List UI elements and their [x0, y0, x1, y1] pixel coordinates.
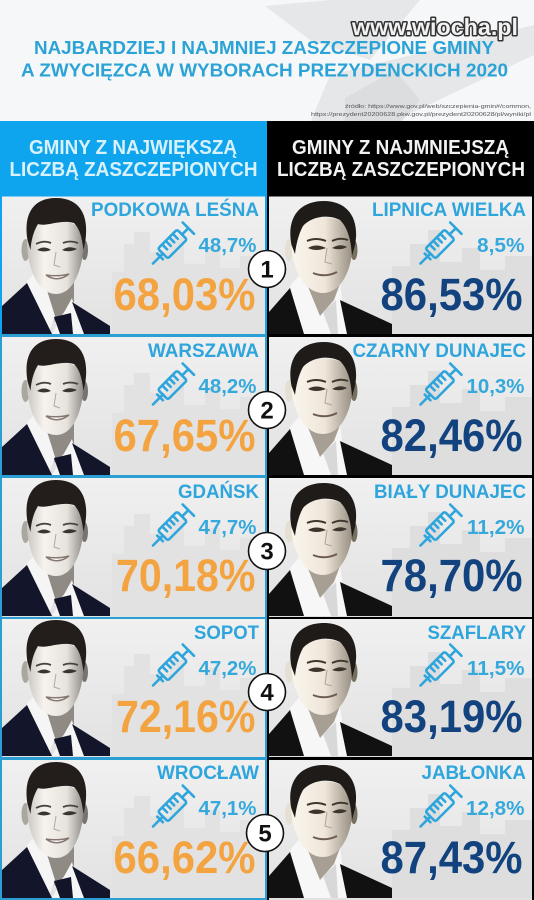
title: [21, 37, 508, 80]
panel: Szaflary: 83,19%: [380, 691, 522, 742]
panel: Czarny Dunajec: CZARNY DUNAJEC: [352, 341, 526, 362]
panel: Szaflary: SZAFLARY: [428, 623, 526, 644]
right column header: LICZBĄ ZASZCZEPIONYCH: [277, 159, 525, 181]
panel: Warszawa: [2, 337, 265, 475]
rank badge 2: [248, 392, 286, 428]
panel: Jabłonka: 87,43%: [380, 832, 522, 883]
panel: Czarny Dunajec: 10,3%: [466, 375, 524, 398]
panel: Podkowa Leśna: 68,03%: [114, 269, 256, 320]
right column header: GMINY Z NAJMNIEJSZĄ: [292, 137, 509, 159]
rank badge 4: [248, 674, 286, 710]
panel: Jabłonka: JABŁONKA: [422, 763, 526, 784]
panel: Podkowa Leśna: [2, 196, 265, 334]
source note: https://prezydent20200628.pkw.gov.pl/prezydent20200628/pl/wyniki/pl: [311, 112, 531, 118]
background vaccine vial decoration: [265, 0, 534, 123]
panel: Wrocław: 66,62%: [114, 832, 256, 883]
rank badge 5: 5: [258, 820, 272, 848]
source note: [311, 104, 531, 118]
panel: Jabłonka: 12,8%: [466, 797, 524, 820]
panel: Lipnica Wielka: 86,53%: [380, 269, 522, 320]
rank badge 4: 4: [260, 680, 274, 706]
panel: Lipnica Wielka: [269, 196, 532, 334]
left column header: [0, 121, 267, 900]
panel: Sopot: 47,2%: [198, 657, 256, 680]
panel: Lipnica Wielka: LIPNICA WIELKA: [372, 200, 526, 221]
panel: Czarny Dunajec: [269, 337, 532, 475]
panel: Wrocław: [2, 760, 265, 898]
watermark: www.wiocha.pl: [351, 14, 518, 40]
panel: Warszawa: WARSZAWA: [148, 341, 259, 362]
panel: Gdańsk: 70,18%: [116, 550, 256, 601]
panel: Biały Dunajec: 11,2%: [467, 516, 524, 539]
left column header: LICZBĄ ZASZCZEPIONYCH: [10, 159, 258, 181]
panel: Warszawa: 67,65%: [114, 410, 256, 461]
panel: Biały Dunajec: [269, 478, 532, 617]
panel: Sopot: SOPOT: [194, 623, 259, 644]
rank badge 1: 1: [260, 256, 274, 284]
panel: Wrocław: WROCŁAW: [157, 763, 259, 784]
panel: Czarny Dunajec: 82,46%: [380, 410, 522, 461]
rank badge 3: 3: [260, 538, 274, 566]
panel: Podkowa Leśna: PODKOWA LEŚNA: [91, 199, 259, 221]
title: NAJBARDZIEJ I NAJMNIEJ ZASZCZEPIONE GMINY: [34, 37, 495, 58]
rank badge 2: 2: [260, 398, 274, 424]
panel: Wrocław: 47,1%: [198, 797, 256, 820]
panel: Jabłonka: [269, 760, 532, 900]
panel: Gdańsk: [2, 478, 265, 617]
panel: Sopot: [2, 619, 265, 757]
panel: Sopot: 72,16%: [116, 691, 256, 742]
right column header: [267, 121, 534, 900]
panel: Gdańsk: GDAŃSK: [178, 481, 259, 503]
rank badge 1: [248, 250, 286, 288]
panel: Podkowa Leśna: 48,7%: [198, 234, 256, 257]
panel: Gdańsk: 47,7%: [198, 516, 256, 539]
left column header: GMINY Z NAJWIĘKSZĄ: [29, 137, 237, 159]
panel: Biały Dunajec: BIAŁY DUNAJEC: [374, 482, 526, 503]
panel: Lipnica Wielka: 8,5%: [477, 234, 524, 257]
title: A ZWYCIĘZCA W WYBORACH PREZYDENCKICH 2020: [21, 60, 508, 80]
rank badge 3: [248, 532, 286, 570]
panel: Szaflary: [269, 619, 532, 757]
panel: Warszawa: 48,2%: [198, 375, 256, 398]
rank badge 5: [246, 814, 284, 852]
source note: źródło: https://www.gov.pl/web/szczepienia-gmin#/common,: [345, 104, 531, 110]
panel: Szaflary: 11,5%: [467, 657, 524, 680]
panel: Biały Dunajec: 78,70%: [380, 550, 522, 601]
page background: [0, 0, 534, 123]
